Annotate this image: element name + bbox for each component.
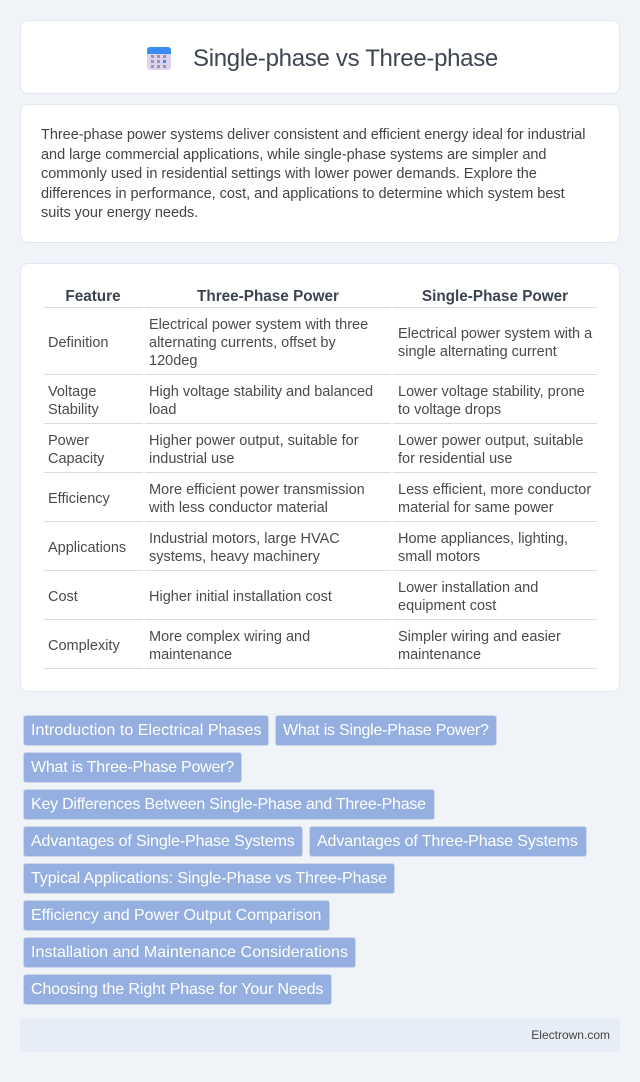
row: voltage stability: Stability — [48, 402, 99, 418]
tag: Choosing the Right Phase for Your Needs — [31, 981, 323, 998]
comparison table card: More efficient power transmission — [149, 482, 365, 498]
tag — [23, 937, 356, 968]
row: complexity: Complexity — [48, 638, 120, 654]
comparison table card: Home appliances, lighting, — [398, 531, 568, 547]
comparison table card: More complex wiring and — [149, 629, 310, 645]
tag: Key Differences Between Single-Phase and Three-Phase — [31, 796, 426, 813]
footer bar — [20, 1018, 620, 1052]
comparison table card: Lower power output, suitable — [398, 433, 583, 449]
comparison table card: Lower voltage stability, prone — [398, 384, 585, 400]
comparison table card: material for same power — [398, 500, 554, 516]
intro paragraph: differences in performance, cost, and applications to determine which system best — [41, 186, 565, 202]
comparison table card: Electrical power system with three — [149, 317, 368, 333]
comparison table card: for residential use — [398, 451, 512, 467]
row: voltage stability — [48, 384, 99, 418]
row: definition: Definition — [48, 335, 108, 351]
tag: Advantages of Single-Phase Systems — [31, 833, 295, 850]
comparison table card: maintenance — [398, 647, 481, 663]
intro paragraph: suits your energy needs. — [41, 205, 198, 221]
comparison table card: Industrial motors, large HVAC — [149, 531, 340, 547]
comparison table card: industrial use — [149, 451, 234, 467]
comparison table card: Less efficient, more conductor — [398, 482, 591, 498]
intro paragraph: Three-phase power systems deliver consistent and efficient energy ideal for industrial — [41, 127, 585, 143]
comparison table card: Lower installation and — [398, 580, 538, 596]
comparison table card: small motors — [398, 549, 480, 565]
column headers: Three-Phase Power — [197, 288, 339, 305]
tag: What is Single-Phase Power? — [283, 722, 489, 739]
row: applications: Applications — [48, 540, 126, 556]
tag — [275, 715, 497, 746]
comparison table card: High voltage stability and balanced — [149, 384, 373, 400]
intro paragraph: and large commercial applications, while single-phase systems are simpler and — [41, 147, 546, 163]
tag: Introduction to Electrical Phases — [31, 722, 262, 739]
tag: Typical Applications: Single-Phase vs Three-Phase — [31, 870, 387, 887]
row: power capacity — [48, 433, 104, 467]
column headers — [65, 288, 568, 305]
column headers: Feature — [65, 288, 121, 305]
comparison table card: load — [149, 402, 176, 418]
row: power capacity: Power — [48, 433, 89, 449]
comparison table card: systems, heavy machinery — [149, 549, 320, 565]
tag — [23, 863, 395, 894]
icon: calendar — [147, 47, 171, 70]
row: power capacity: Capacity — [48, 451, 104, 467]
intro paragraph — [41, 127, 585, 221]
comparison table card: 120deg — [149, 353, 197, 369]
comparison table card: maintenance — [149, 647, 232, 663]
intro text card — [20, 104, 620, 243]
comparison table card: Higher initial installation cost — [149, 589, 332, 605]
comparison table card: single alternating current — [398, 344, 557, 360]
header card — [20, 20, 620, 94]
comparison table card: alternating currents, offset by — [149, 335, 336, 351]
row: voltage stability: Voltage — [48, 384, 96, 400]
title: Single-phase vs Three-phase — [193, 45, 498, 72]
tag: Efficiency and Power Output Comparison — [31, 907, 321, 924]
row: efficiency: Efficiency — [48, 491, 110, 507]
footer credit: Electrown.com — [531, 1028, 610, 1042]
intro paragraph: commonly used in residential settings with lower power demands. Explore the — [41, 166, 537, 182]
tag — [23, 752, 242, 783]
comparison table card: Higher power output, suitable for — [149, 433, 359, 449]
row: cost: Cost — [48, 589, 78, 605]
tag: What is Three-Phase Power? — [31, 759, 234, 776]
tag: Advantages of Three-Phase Systems — [317, 833, 578, 850]
comparison table card: Electrical power system with a — [398, 326, 592, 342]
comparison table card: Simpler wiring and easier — [398, 629, 561, 645]
tag — [23, 826, 303, 857]
tag — [23, 900, 330, 931]
tag — [23, 715, 269, 746]
comparison table card: to voltage drops — [398, 402, 501, 418]
comparison table card: with less conductor material — [149, 500, 328, 516]
comparison table card — [20, 263, 620, 692]
tag — [309, 826, 587, 857]
tag — [23, 789, 435, 820]
tag: Installation and Maintenance Considerations — [31, 944, 348, 961]
comparison table card: equipment cost — [398, 598, 496, 614]
topic tags — [23, 715, 587, 1005]
column headers: Single-Phase Power — [422, 288, 568, 305]
tag — [23, 974, 332, 1005]
